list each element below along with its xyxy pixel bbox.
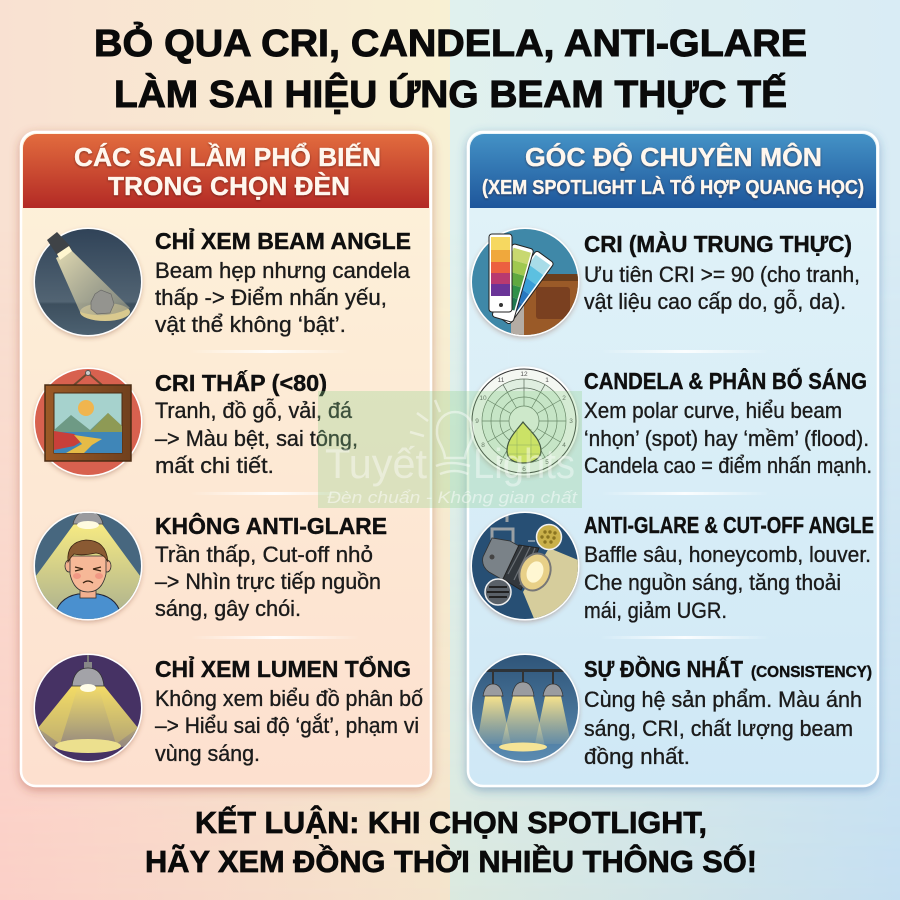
conclusion — [145, 804, 757, 879]
heading and text: total lumen: Không xem biểu đồ phân bố — [155, 686, 423, 711]
panel header: mistakes — [23, 134, 429, 208]
heading and text: beam angle: CHỈ XEM BEAM ANGLE — [155, 226, 411, 254]
icon: narrow spotlight on rock — [33, 227, 143, 337]
conclusion: HÃY XEM ĐỒNG THỜI NHIỀU THÔNG SỐ! — [145, 843, 757, 879]
heading and text: CRI: vật liệu cao cấp do, gỗ, da). — [584, 289, 846, 314]
heading and text: no anti-glare: KHÔNG ANTI-GLARE — [155, 512, 387, 539]
heading and text: beam angle — [155, 226, 411, 337]
watermark — [318, 391, 582, 508]
panel header: mistakes: TRONG CHỌN ĐÈN — [108, 171, 350, 201]
panel header: expert — [470, 134, 876, 208]
panel header: expert: GÓC ĐỘ CHUYÊN MÔN — [525, 142, 822, 172]
icon: glare person — [33, 511, 143, 621]
icon: polar curve — [470, 366, 578, 476]
icon: polar curve: 4 — [562, 442, 566, 449]
icon: polar curve: 12 — [520, 371, 528, 378]
heading and text: no anti-glare: –> Nhìn trực tiếp nguồn — [155, 569, 381, 594]
heading and text: anti-glare: Che nguồn sáng, tăng thoải — [584, 570, 841, 595]
panel: expert view — [468, 132, 878, 786]
icon: three matching track lights — [470, 653, 580, 763]
heading and text: total lumen: CHỈ XEM LUMEN TỔNG — [155, 654, 411, 682]
watermark: Tuyết — [325, 440, 427, 487]
icon: polar curve: 3 — [569, 418, 573, 425]
heading and text: consistency: Cùng hệ sản phẩm. Màu ánh — [584, 687, 862, 712]
icon: polar curve: 1 — [545, 377, 549, 384]
panel header: mistakes: CÁC SAI LẦM PHỔ BIẾN — [74, 142, 381, 172]
heading and text: beam angle: Beam hẹp nhưng candela — [155, 258, 411, 283]
heading and text: consistency: đồng nhất. — [584, 744, 690, 769]
icon: polar curve: 5 — [545, 459, 549, 466]
heading and text: consistency: SỰ ĐỒNG NHẤT — [584, 655, 743, 682]
heading and text: total lumen: –> Hiểu sai độ ‘gắt’, phạm vi — [155, 713, 419, 738]
heading and text: CRI: Ưu tiên CRI >= 90 (cho tranh, — [584, 262, 860, 287]
heading and text: candela: ‘nhọn’ (spot) hay ‘mềm’ (flood). — [584, 426, 869, 451]
icon: spotlight with baffle and honeycomb — [470, 511, 583, 621]
conclusion: KẾT LUẬN: KHI CHỌN SPOTLIGHT, — [195, 804, 707, 840]
heading and text: candela: CANDELA & PHÂN BỐ SÁNG — [584, 367, 867, 394]
heading and text: consistency: (CONSISTENCY) — [751, 664, 872, 681]
heading and text: no anti-glare: Trần thấp, Cut-off nhỏ — [155, 542, 373, 567]
heading and text: no anti-glare: sáng, gây chói. — [155, 596, 301, 621]
icon: polar curve: 11 — [498, 377, 505, 384]
heading and text: low CRI: CRI THẤP (<80) — [155, 369, 327, 396]
title: BỎ QUA CRI, CANDELA, ANTI-GLARE — [94, 21, 807, 65]
icon: polar curve: 8 — [481, 442, 485, 449]
icon: polar curve: 9 — [475, 418, 479, 425]
heading and text: total lumen: vùng sáng. — [155, 741, 260, 766]
icon: polar curve: 7 — [499, 459, 503, 466]
heading and text: total lumen — [155, 654, 423, 766]
icon: pendant lamp lumen — [33, 653, 143, 763]
icon: polar curve: 10 — [479, 395, 487, 402]
heading and text: beam angle: vật thể không ‘bật’. — [155, 312, 346, 337]
panel: common mistakes — [21, 132, 431, 786]
heading and text: anti-glare: Baffle sâu, honeycomb, louver. — [584, 542, 871, 567]
heading and text: no anti-glare — [155, 512, 387, 621]
heading and text: consistency — [584, 655, 872, 769]
icon: polar curve: 6 — [522, 466, 526, 473]
heading and text: candela: Xem polar curve, hiểu beam — [584, 398, 842, 423]
heading and text: low CRI: Tranh, đồ gỗ, vải, đá — [155, 398, 353, 423]
panel header: expert: (XEM SPOTLIGHT LÀ TỔ HỢP QUANG HỌC) — [482, 175, 864, 199]
heading and text: low CRI: mất chi tiết. — [155, 453, 274, 478]
heading and text: beam angle: thấp -> Điểm nhấn yếu, — [155, 285, 387, 310]
heading and text: anti-glare — [584, 512, 874, 623]
icon: polar curve: 2 — [562, 395, 566, 402]
title: LÀM SAI HIỆU ỨNG BEAM THỰC TẾ — [114, 72, 787, 116]
icon: colour swatches and wood — [470, 227, 583, 344]
title — [94, 21, 807, 116]
icon: framed painting — [34, 368, 142, 476]
watermark: Đèn chuẩn - Không gian chất — [327, 488, 578, 507]
heading and text: consistency: sáng, CRI, chất lượng beam — [584, 716, 853, 741]
heading and text: candela: Candela cao = điểm nhấn mạnh. — [584, 453, 872, 478]
heading and text: CRI: CRI (MÀU TRUNG THỰC) — [584, 230, 852, 257]
heading and text: anti-glare: mái, giảm UGR. — [584, 598, 727, 623]
watermark: Lights — [473, 440, 575, 487]
heading and text: CRI — [584, 230, 860, 314]
heading and text: low CRI — [155, 369, 358, 478]
heading and text: candela — [584, 367, 872, 478]
heading and text: low CRI: –> Màu bệt, sai tông, — [155, 426, 358, 451]
